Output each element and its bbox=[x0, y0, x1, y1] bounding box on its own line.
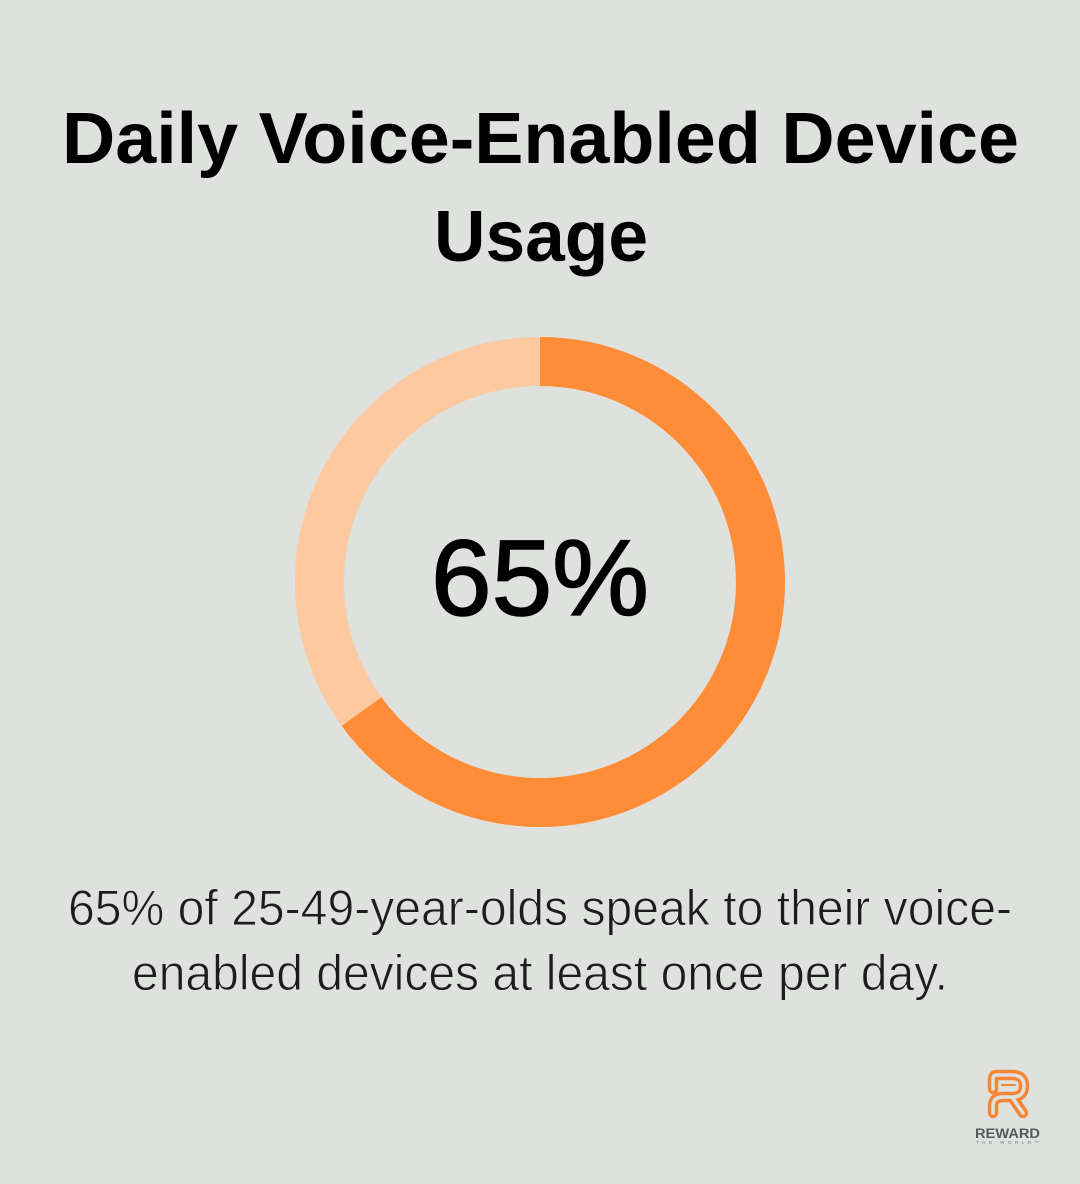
description text bbox=[68, 880, 1012, 1001]
icon: stylized R bbox=[993, 1075, 1024, 1113]
tagline: THE WORLD™ bbox=[976, 1140, 1039, 1145]
logo: Reward the World bbox=[975, 1075, 1040, 1145]
description text: 65% of 25-49-year-olds speak to their voice- bbox=[68, 880, 1012, 936]
center statistic: 65% bbox=[431, 517, 649, 638]
description text: enabled devices at least once per day. bbox=[132, 945, 948, 1001]
title: Usage bbox=[434, 197, 648, 277]
title: Daily Voice-Enabled Device bbox=[62, 99, 1019, 179]
donut chart: 65 percent bbox=[320, 362, 760, 803]
title bbox=[62, 99, 1019, 277]
wordmark: REWARD bbox=[975, 1126, 1040, 1141]
